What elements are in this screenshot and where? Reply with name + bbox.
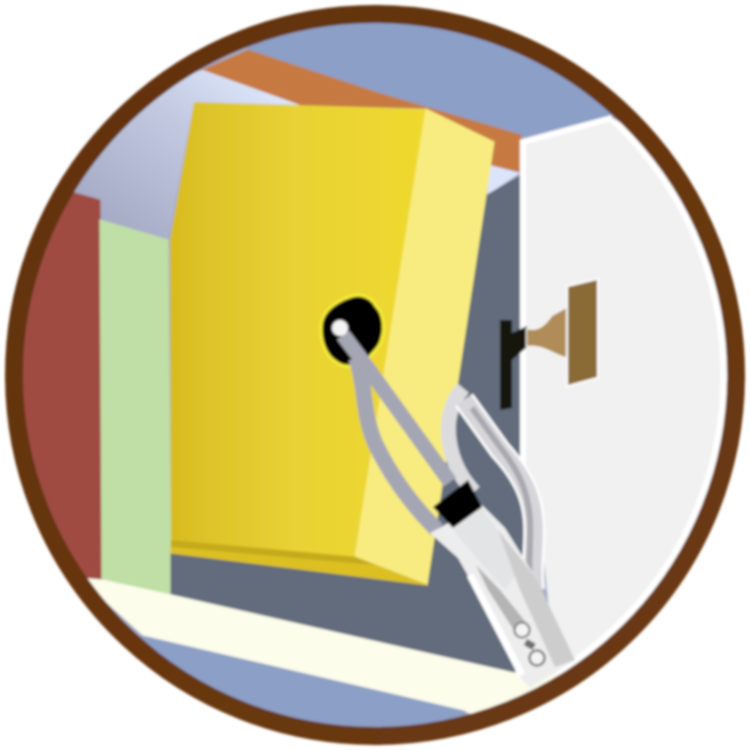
- panel: light gap behind box: [487, 165, 520, 195]
- handle shadow facet: [476, 566, 526, 629]
- panel: red book: [20, 190, 103, 581]
- yellow box underside: [171, 540, 427, 585]
- front prong straight: [343, 335, 450, 482]
- handle bright edge: [470, 575, 522, 675]
- underside shadow strip: [171, 540, 375, 565]
- panel: grey inner wall: [171, 176, 545, 673]
- panel: blue floor: [140, 635, 466, 728]
- panel: green book: [100, 220, 171, 595]
- door bright rim: [557, 119, 728, 676]
- knob backplate: [500, 320, 527, 410]
- back prong left: [448, 388, 474, 492]
- knob plate: [568, 280, 597, 385]
- door bright edge: [523, 118, 612, 470]
- yellow box front: [170, 102, 426, 557]
- handle right facet: [498, 530, 575, 667]
- panel: orange top rail: [203, 50, 521, 172]
- pliers handle: [430, 505, 575, 688]
- rivet gap: [524, 639, 536, 650]
- panel: yellow box: [170, 102, 494, 585]
- panel: blue ceiling: [246, 20, 612, 138]
- icon: door knob: [500, 280, 597, 410]
- icon: pliers: [332, 320, 575, 688]
- knob neck: [527, 306, 570, 358]
- black band: [433, 480, 482, 528]
- pivot dot: [332, 320, 348, 336]
- rivet bottom: [530, 650, 544, 666]
- yellow box side: [355, 109, 494, 585]
- front prong curved: [356, 358, 437, 530]
- icon: black hole in box: [321, 295, 384, 366]
- panel: light blue back wall: [82, 68, 301, 224]
- panel: white shelf: [84, 576, 558, 716]
- handle top facet: [455, 510, 514, 588]
- door face: [524, 120, 722, 658]
- back prong right: [464, 400, 534, 590]
- panel: white door: [517, 114, 730, 676]
- rivet top: [514, 622, 530, 638]
